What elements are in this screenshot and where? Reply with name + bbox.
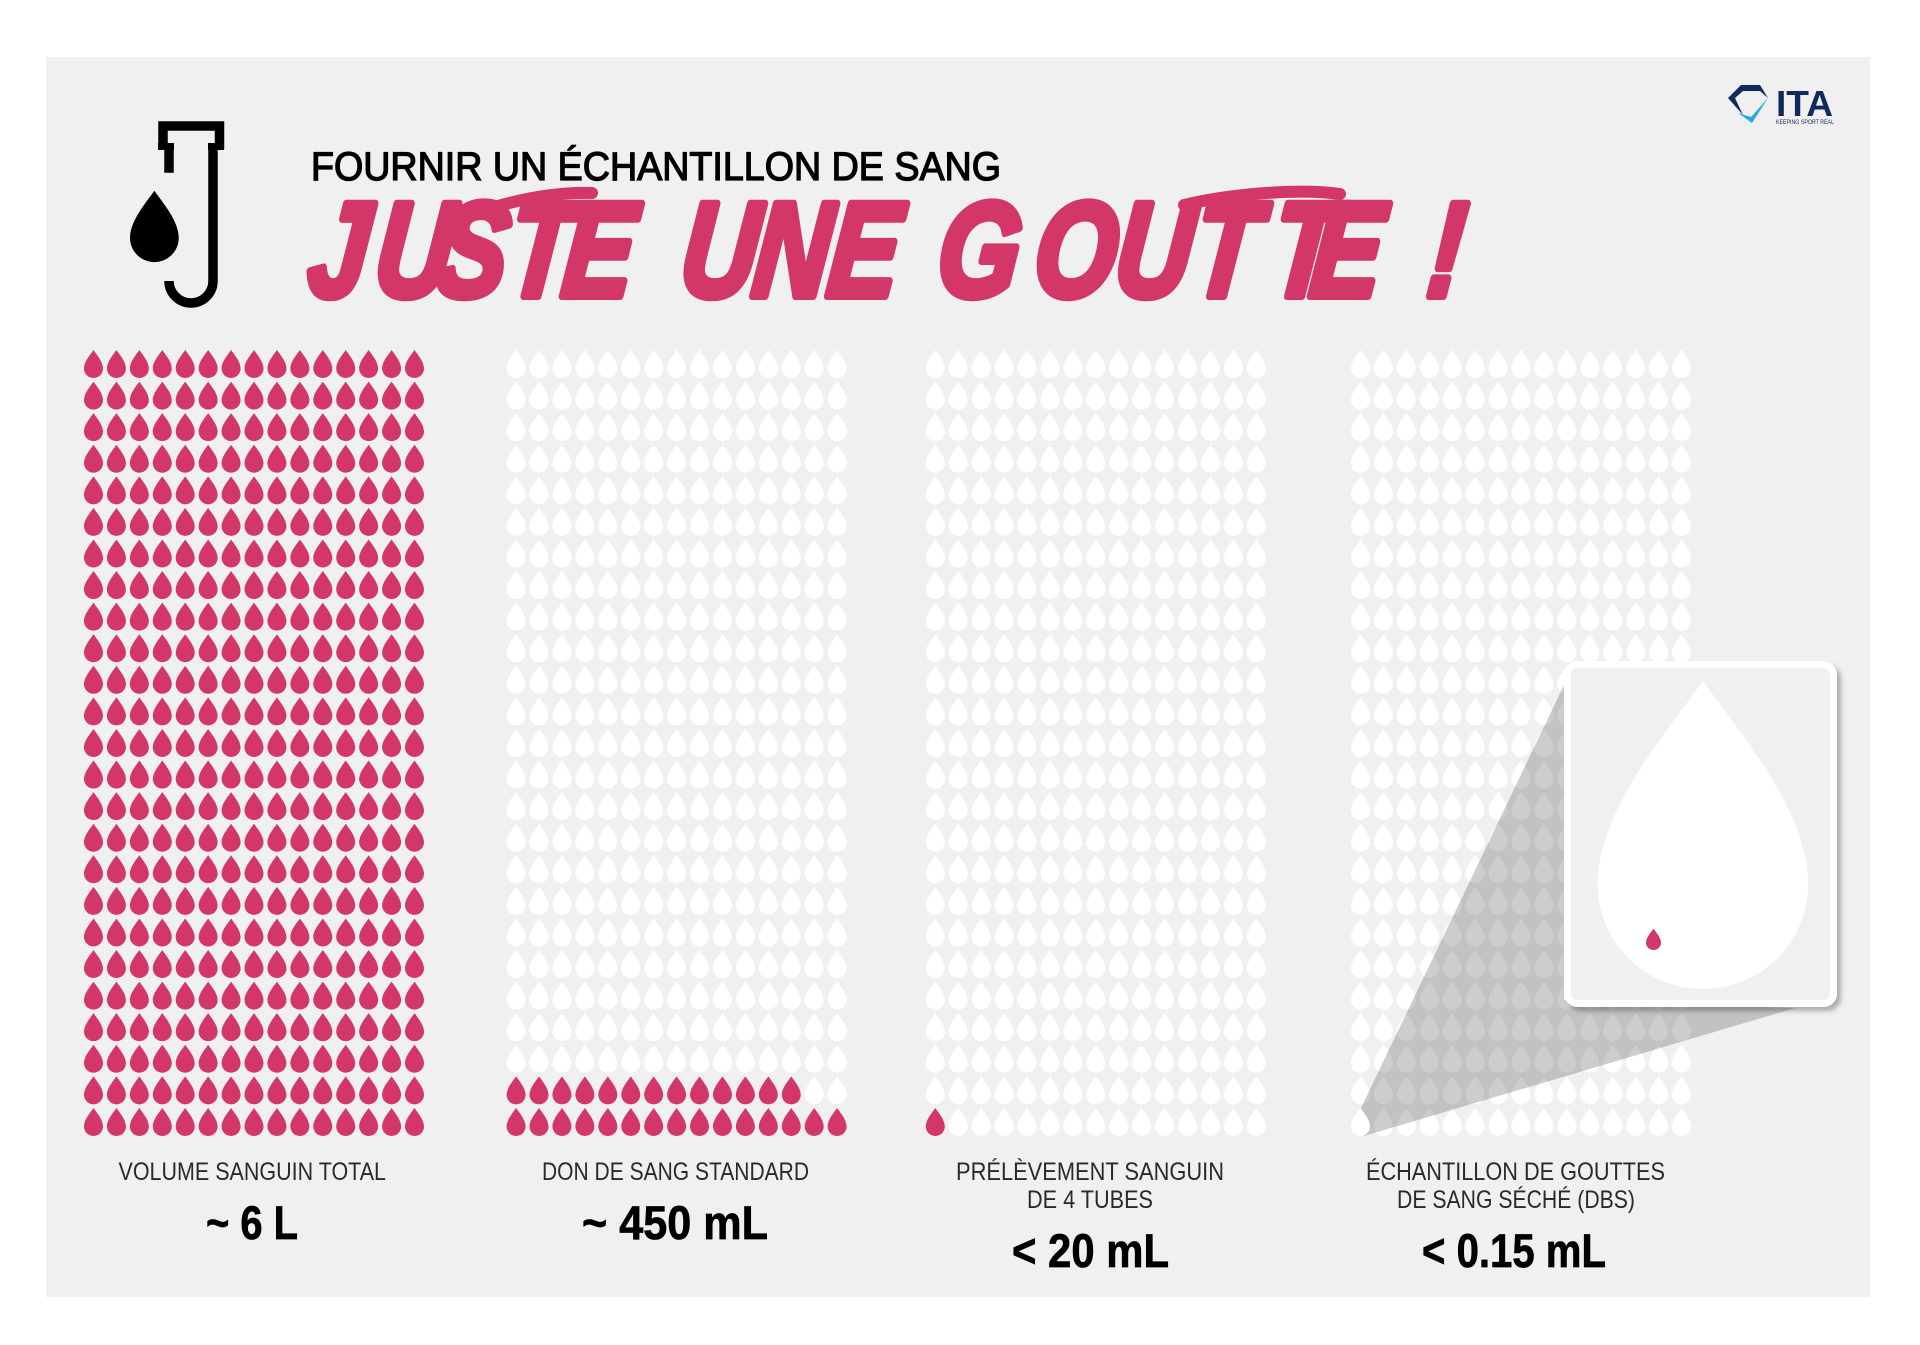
big white drop <box>1598 681 1808 989</box>
drop grid: all red <box>84 350 424 1136</box>
small red drop <box>1646 929 1661 950</box>
zoom cone shadow <box>1361 685 1795 1136</box>
title: juste une goutte: JUSTE UNE GOUTTE ! <box>303 175 1473 325</box>
column 4: dried blood spot <box>1351 350 1795 1277</box>
logo: ITA: KEEPING SPORT REAL <box>1776 119 1834 126</box>
column 3: four tube blood draw <box>926 350 1266 1277</box>
drop grid: white <box>507 350 847 1136</box>
value: ~ 6 L <box>206 1196 298 1249</box>
first drop above cone <box>1351 1108 1370 1136</box>
column 2: standard blood donation <box>507 350 847 1249</box>
drop grid: white <box>1351 350 1691 1136</box>
label: DE 4 TUBES <box>1027 1186 1153 1214</box>
value: < 0.15 mL <box>1422 1224 1606 1277</box>
drop grid: white <box>926 350 1266 1136</box>
value: < 20 mL <box>1012 1224 1169 1277</box>
label <box>1366 1157 1665 1214</box>
red drop <box>926 1108 945 1136</box>
label: ÉCHANTILLON DE GOUTTES <box>1366 1157 1665 1186</box>
label: VOLUME SANGUIN TOTAL <box>118 1158 386 1186</box>
label: PRÉLÈVEMENT SANGUIN <box>956 1157 1224 1186</box>
heading: fournir un échantillon de sang: FOURNIR UN ÉCHANTILLON DE SANG <box>311 144 1001 189</box>
logo: ITA: ITA <box>1776 83 1833 124</box>
label: DON DE SANG STANDARD <box>542 1158 809 1186</box>
logo: ITA <box>1728 83 1834 126</box>
value: ~ 450 mL <box>582 1196 768 1249</box>
column 1: total blood volume <box>84 350 424 1249</box>
red drops: two bottom rows <box>507 1076 847 1136</box>
zoom card <box>1568 664 1834 1004</box>
icon: test tube with blood drop <box>130 126 224 303</box>
label: DE SANG SÉCHÉ (DBS) <box>1397 1185 1635 1214</box>
label <box>956 1157 1224 1214</box>
